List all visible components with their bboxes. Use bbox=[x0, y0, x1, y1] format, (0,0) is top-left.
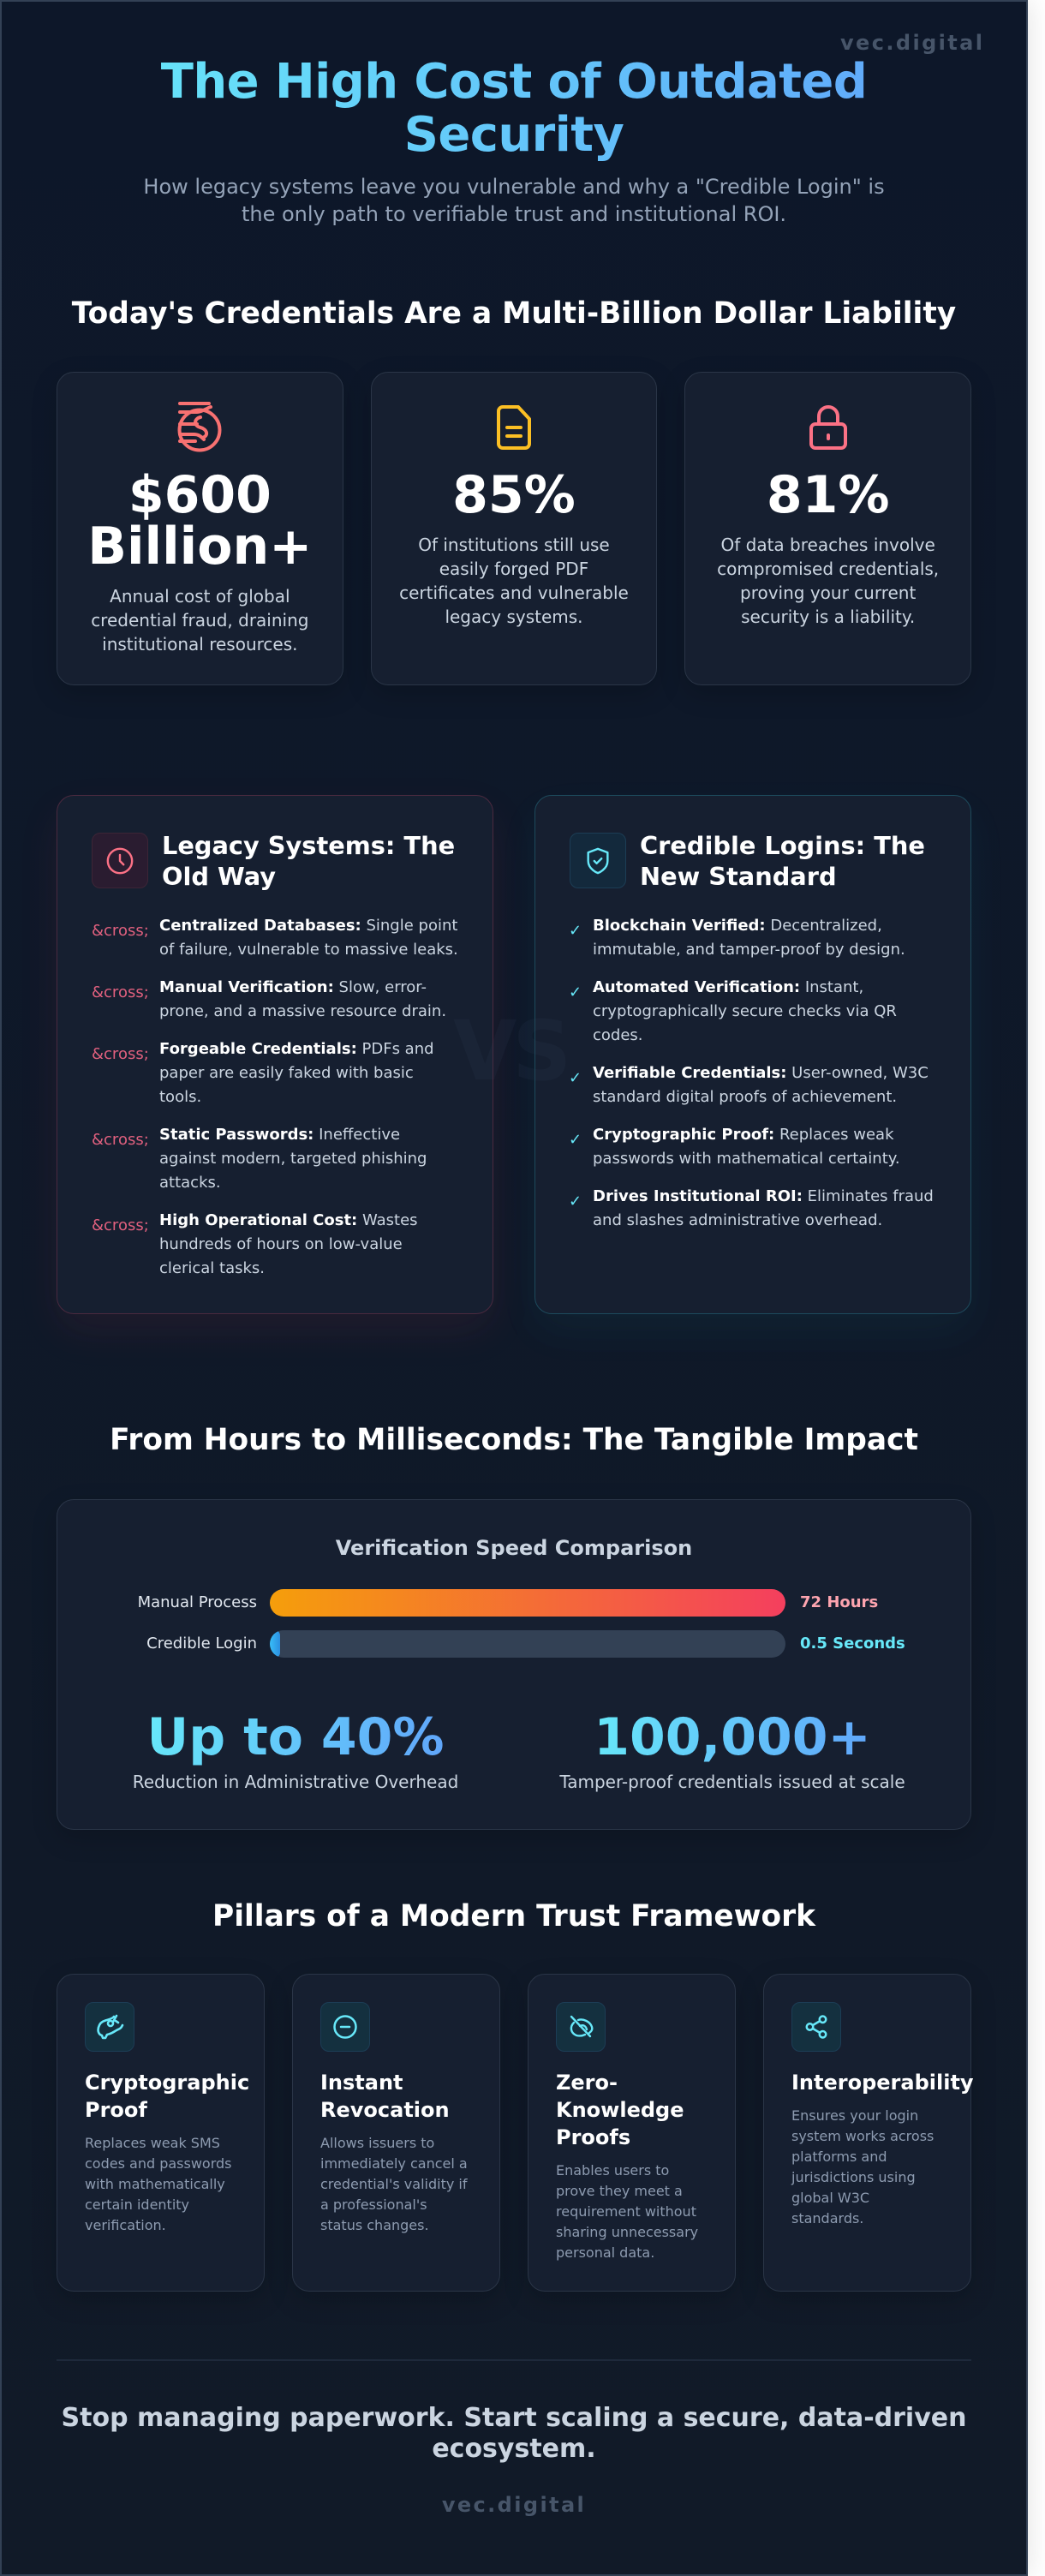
item text: High Operational Cost: Wastes bbox=[159, 1211, 418, 1229]
panel: pillar zero-knowledge proofs bbox=[528, 1974, 736, 2292]
stat description: compromised credentials, bbox=[717, 559, 939, 579]
stat number bbox=[87, 465, 312, 577]
check marker: ✓ bbox=[569, 1192, 582, 1210]
panel: impact bbox=[57, 1499, 971, 1830]
stat description bbox=[399, 535, 629, 627]
cross marker: &cross; bbox=[92, 1216, 149, 1234]
item text bbox=[593, 1064, 929, 1106]
item text: of failure, vulnerable to massive leaks. bbox=[159, 941, 458, 959]
panel: stat $600 billion bbox=[57, 372, 343, 685]
item text bbox=[593, 978, 897, 1044]
item text bbox=[593, 917, 905, 959]
bar: manual process bbox=[270, 1589, 785, 1617]
panel: pillar interoperability bbox=[763, 1974, 971, 2292]
item text: passwords with mathematical certainty. bbox=[593, 1150, 900, 1168]
pillar description: platforms and bbox=[791, 2149, 887, 2165]
chart heading: Verification Speed Comparison bbox=[336, 1536, 692, 1560]
pillar title bbox=[85, 2071, 249, 2122]
panel heading: Credible Logins: The bbox=[640, 831, 925, 860]
impact metric: credentials bbox=[559, 1707, 905, 1792]
stat description: institutional resources. bbox=[102, 634, 298, 654]
item text: and slashes administrative overhead. bbox=[593, 1211, 882, 1229]
brand mark: footer: vec.digital bbox=[442, 2493, 586, 2517]
item text: Drives Institutional ROI: Eliminates fraud bbox=[593, 1187, 934, 1205]
metric caption: Tamper-proof credentials issued at scale bbox=[559, 1772, 905, 1792]
icon: broken dollar coin bbox=[178, 402, 221, 452]
pillar title: Interoperability bbox=[791, 2071, 974, 2095]
cross marker: &cross; bbox=[92, 922, 149, 940]
check marker: ✓ bbox=[569, 922, 582, 940]
stat number: $600 bbox=[128, 465, 272, 525]
panel: pillar instant revocation bbox=[292, 1974, 500, 2292]
panel heading: Old Way bbox=[162, 862, 276, 891]
item text: paper are easily faked with basic bbox=[159, 1064, 414, 1082]
watermark: VS: VS bbox=[453, 1003, 567, 1099]
item text bbox=[159, 978, 446, 1020]
stat description: credential fraud, draining bbox=[91, 610, 308, 631]
item text bbox=[159, 1126, 427, 1192]
pillar description: Ensures your login bbox=[791, 2107, 918, 2124]
icon: file bbox=[497, 405, 531, 450]
item text: standard digital proofs of achievement. bbox=[593, 1088, 897, 1106]
item text: Centralized Databases: Single point bbox=[159, 917, 457, 935]
brand mark: top right: vec.digital bbox=[840, 31, 984, 55]
bar label: Manual Process bbox=[138, 1593, 257, 1611]
pillar description: a professional's bbox=[320, 2196, 427, 2213]
item text: against modern, targeted phishing bbox=[159, 1150, 427, 1168]
item text: attacks. bbox=[159, 1174, 221, 1192]
item text bbox=[159, 1040, 434, 1106]
cross marker: &cross; bbox=[92, 1045, 149, 1063]
panel heading bbox=[640, 831, 925, 891]
pillar description: verification. bbox=[85, 2217, 166, 2233]
title: Security bbox=[404, 107, 624, 163]
heading: impact section: From Hours to Milliseconds: The Tangible Impact bbox=[110, 1423, 918, 1457]
pillar title: Proofs bbox=[556, 2125, 630, 2149]
pillar description: requirement without bbox=[556, 2203, 696, 2220]
panel: credible logins bbox=[534, 795, 971, 1314]
stat description: proving your current bbox=[740, 583, 916, 603]
item text: Blockchain Verified: Decentralized, bbox=[593, 917, 882, 935]
list bbox=[92, 917, 458, 1277]
pillar description: Enables users to bbox=[556, 2162, 669, 2179]
item text: Cryptographic Proof: Replaces weak bbox=[593, 1126, 894, 1144]
pillar title: Proof bbox=[85, 2098, 147, 2122]
panel: legacy systems bbox=[57, 795, 493, 1314]
cross marker: &cross; bbox=[92, 1131, 149, 1149]
item text: immutable, and tamper-proof by design. bbox=[593, 941, 905, 959]
stat description: security is a liability. bbox=[741, 607, 915, 627]
icon: clock bbox=[92, 833, 148, 888]
pillar description: standards. bbox=[791, 2210, 863, 2226]
pillar description: Replaces weak SMS bbox=[85, 2135, 220, 2151]
pillar description: jurisdictions using bbox=[791, 2169, 916, 2185]
pillar description: status changes. bbox=[320, 2217, 429, 2233]
closing statement: ecosystem. bbox=[432, 2434, 596, 2464]
stat description: Of data breaches involve bbox=[720, 535, 935, 555]
pillar description: with mathematically bbox=[85, 2176, 225, 2192]
item text: codes. bbox=[593, 1026, 643, 1044]
bar label: Credible Login bbox=[146, 1635, 257, 1653]
item text: Static Passwords: Ineffective bbox=[159, 1126, 400, 1144]
pillar title: Zero- bbox=[556, 2071, 618, 2095]
bar value: 0.5 Seconds bbox=[800, 1635, 905, 1653]
pillar title: Knowledge bbox=[556, 2098, 684, 2122]
heading: liability section: Today's Credentials Are a Multi-Billion Dollar Liability bbox=[72, 296, 956, 331]
icon: eye off bbox=[556, 2002, 606, 2052]
pillar title: Cryptographic bbox=[85, 2071, 249, 2095]
panel heading: New Standard bbox=[640, 862, 837, 891]
icon: shield check bbox=[570, 833, 626, 888]
item text bbox=[159, 917, 458, 959]
stat number: Billion+ bbox=[87, 517, 312, 577]
panel: stat 81% bbox=[684, 372, 971, 685]
subtitle bbox=[143, 175, 885, 226]
check marker: ✓ bbox=[569, 983, 582, 1001]
bar value: 72 Hours bbox=[800, 1593, 878, 1611]
item text: cryptographically secure checks via QR bbox=[593, 1002, 897, 1020]
pillar description: sharing unnecessary bbox=[556, 2224, 698, 2240]
pillar description: certain identity bbox=[85, 2196, 189, 2213]
pillar description: codes and passwords bbox=[85, 2155, 231, 2172]
title bbox=[87, 56, 940, 161]
pillar description: prove they meet a bbox=[556, 2183, 683, 2199]
pillar description: credential's validity if bbox=[320, 2176, 467, 2192]
item text bbox=[593, 1187, 934, 1229]
closing statement bbox=[62, 2403, 966, 2464]
stat description: Annual cost of global bbox=[110, 586, 290, 607]
icon: minus circle bbox=[320, 2002, 370, 2052]
stat description: easily forged PDF bbox=[439, 559, 588, 579]
stat description: legacy systems. bbox=[445, 607, 583, 627]
item text: Verifiable Credentials: User-owned, W3C bbox=[593, 1064, 929, 1082]
pillar description: immediately cancel a bbox=[320, 2155, 468, 2172]
item text: Manual Verification: Slow, error- bbox=[159, 978, 427, 996]
subtitle: the only path to verifiable trust and institutional ROI. bbox=[242, 202, 786, 226]
pillar title: Instant bbox=[320, 2071, 403, 2095]
pillar description: personal data. bbox=[556, 2244, 654, 2261]
icon: fingerprint blob bbox=[85, 2002, 134, 2052]
item text: clerical tasks. bbox=[159, 1259, 265, 1277]
pillar description bbox=[556, 2162, 698, 2261]
panel: pillar cryptographic proof bbox=[57, 1974, 265, 2292]
stat number: 85% bbox=[452, 465, 576, 525]
item text bbox=[159, 1211, 418, 1277]
item text: Forgeable Credentials: PDFs and bbox=[159, 1040, 434, 1058]
pillar description bbox=[791, 2107, 934, 2226]
title: The High Cost of Outdated bbox=[161, 54, 867, 110]
bar chart bbox=[138, 1589, 905, 1658]
subtitle: How legacy systems leave you vulnerable and why a "Credible Login" is bbox=[143, 175, 885, 199]
stat number: 81% bbox=[767, 465, 889, 525]
list bbox=[569, 917, 934, 1229]
pillar description: Allows issuers to bbox=[320, 2135, 434, 2151]
stat description bbox=[91, 586, 308, 654]
metric number: 100,000+ bbox=[594, 1707, 871, 1767]
heading: pillars section: Pillars of a Modern Trust Framework bbox=[212, 1899, 815, 1933]
pillar description bbox=[85, 2135, 231, 2233]
item text: hundreds of hours on low-value bbox=[159, 1235, 403, 1253]
panel: stat 85% bbox=[371, 372, 657, 685]
check marker: ✓ bbox=[569, 1069, 582, 1087]
closing statement: Stop managing paperwork. Start scaling a secure, data-driven bbox=[62, 2403, 966, 2433]
pillar title bbox=[556, 2071, 684, 2149]
item text: prone, and a massive resource drain. bbox=[159, 1002, 446, 1020]
stat description bbox=[717, 535, 939, 627]
check marker: ✓ bbox=[569, 1131, 582, 1149]
pillar title bbox=[320, 2071, 450, 2122]
metric caption: Reduction in Administrative Overhead bbox=[133, 1772, 458, 1792]
item text bbox=[593, 1126, 900, 1168]
stat description: certificates and vulnerable bbox=[399, 583, 629, 603]
pillar description: global W3C bbox=[791, 2190, 869, 2206]
item text: tools. bbox=[159, 1088, 201, 1106]
icon: share bbox=[791, 2002, 841, 2052]
impact metric: overhead bbox=[133, 1707, 458, 1792]
pillar description bbox=[320, 2135, 468, 2233]
pillar description: system works across bbox=[791, 2128, 934, 2144]
stat description: Of institutions still use bbox=[418, 535, 610, 555]
metric number: Up to 40% bbox=[147, 1707, 444, 1767]
icon: lock bbox=[809, 405, 847, 450]
cross marker: &cross; bbox=[92, 983, 149, 1001]
pillar title: Revocation bbox=[320, 2098, 450, 2122]
bar: credible login track bbox=[270, 1630, 785, 1658]
panel heading bbox=[162, 831, 455, 891]
item text: Automated Verification: Instant, bbox=[593, 978, 863, 996]
panel heading: Legacy Systems: The bbox=[162, 831, 455, 860]
footer divider bbox=[57, 2359, 971, 2361]
